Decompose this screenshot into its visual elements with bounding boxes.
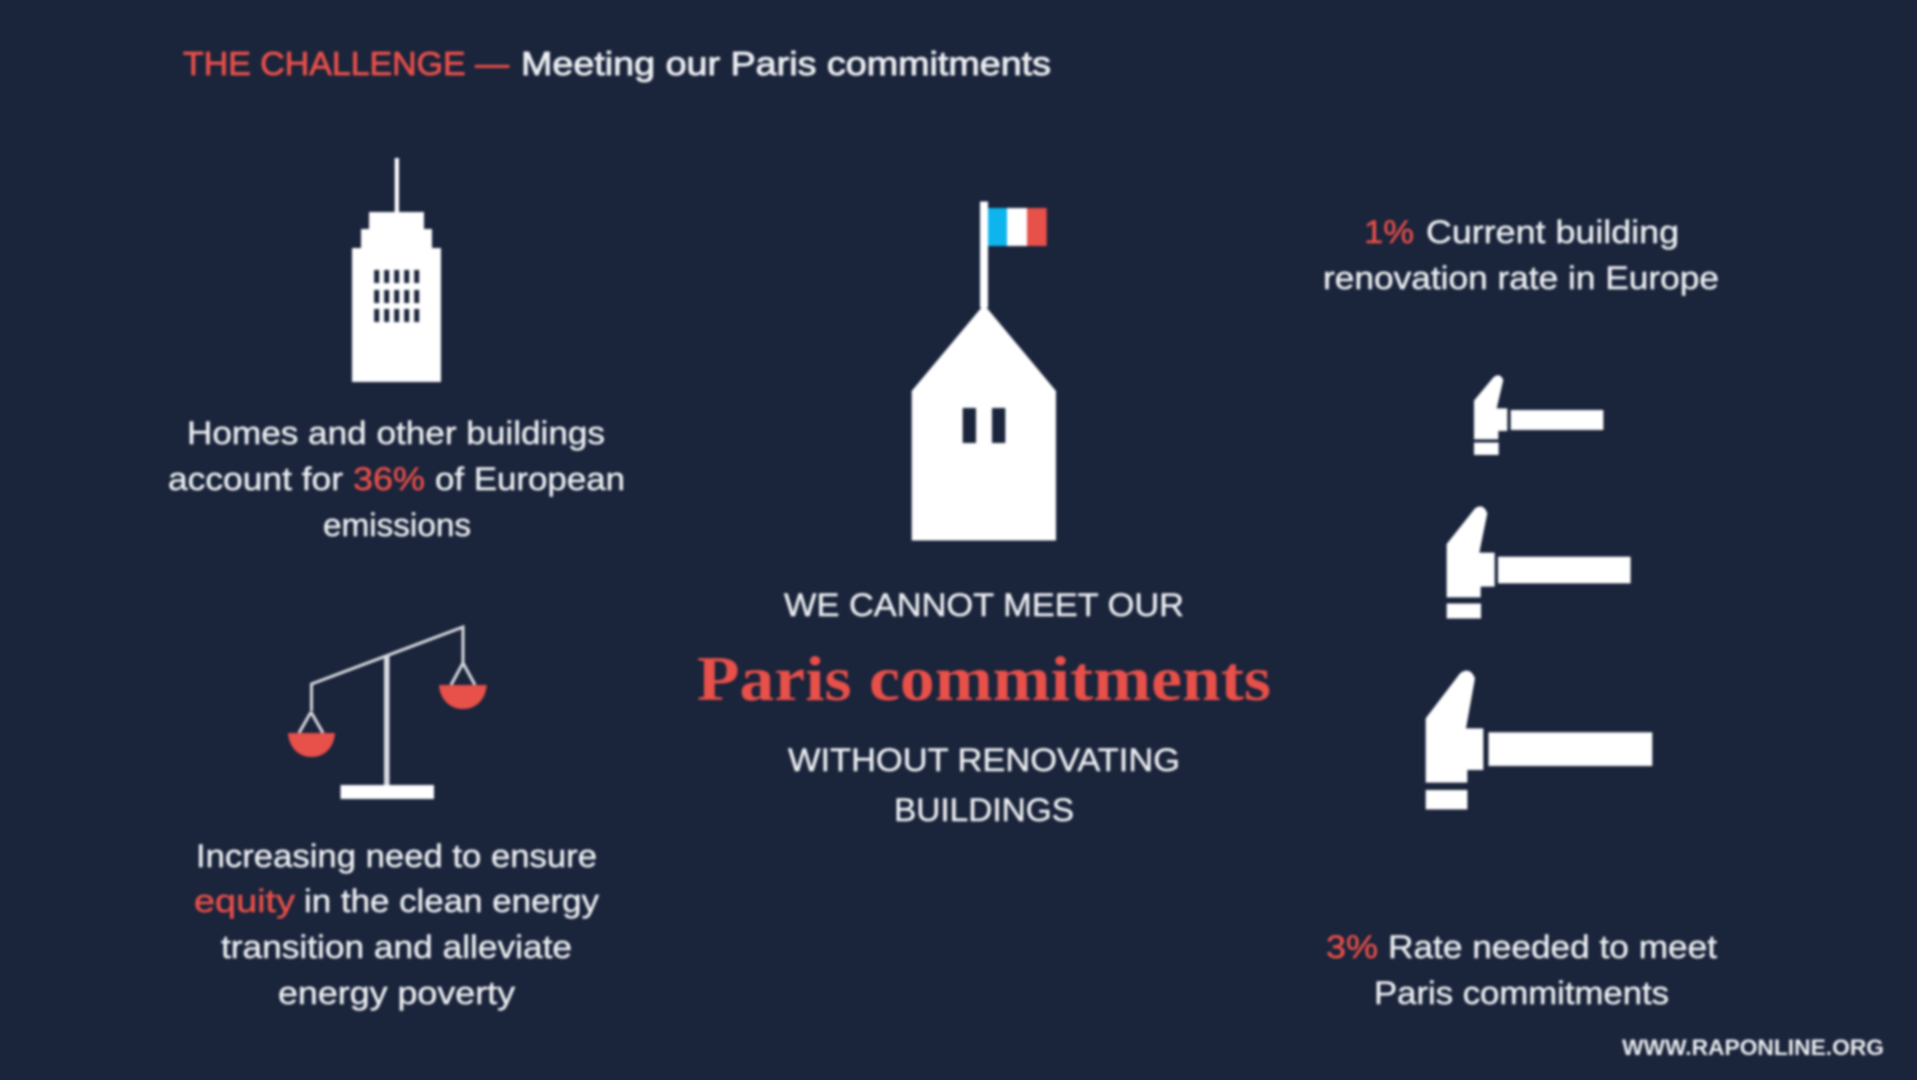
title [183, 45, 1051, 82]
icon: balance scale [288, 627, 487, 799]
text: buildings account for 36% of emissions: of European [435, 461, 625, 497]
icon: small hammer [1474, 375, 1603, 455]
text: 3% needed rate: 3% [1326, 929, 1378, 965]
text: buildings account for 36% of emissions: Homes and other buildings [187, 415, 605, 451]
text: buildings account for 36% of emissions: account for [168, 461, 343, 497]
icon: house with French flag [912, 202, 1056, 540]
title: Meeting our Paris commitments [521, 45, 1051, 82]
panel: building emissions [168, 158, 625, 543]
text: 3% needed rate: Rate needed to meet [1388, 929, 1717, 965]
text: 3% needed rate [1326, 929, 1717, 1011]
text: 3% needed rate: Paris commitments [1374, 975, 1669, 1011]
panel: central message [697, 202, 1271, 828]
text: equity in the clean energy transition [194, 838, 599, 1011]
text: equity in the clean energy transition: transition and alleviate [221, 929, 572, 965]
text: 1% current rate: 1% [1364, 214, 1414, 250]
icon: medium hammer [1447, 506, 1631, 618]
title: THE CHALLENGE — [183, 45, 509, 82]
text: equity in the clean energy transition: Increasing need to ensure [196, 838, 597, 874]
panel: equity [194, 627, 599, 1011]
text: without renovating buildings: BUILDINGS [894, 792, 1074, 828]
heading: Paris commitments: Paris commitments [697, 644, 1271, 714]
text: equity in the clean energy transition: equity [194, 883, 295, 919]
icon: large hammer [1426, 671, 1652, 809]
source url: WWW.RAPONLINE.ORG [1622, 1035, 1884, 1060]
text: buildings account for 36% of emissions: 36% [353, 461, 425, 497]
text: buildings account for 36% of emissions: emissions [323, 507, 471, 543]
text: equity in the clean energy transition: energy poverty [278, 975, 515, 1011]
text: 1% current rate: renovation rate in Europe [1323, 260, 1719, 296]
text: 1% current rate: Current building [1426, 214, 1679, 250]
panel: renovation rates [1323, 214, 1719, 1011]
text: 1% current rate [1323, 214, 1719, 296]
text: equity in the clean energy transition: in the clean energy [304, 883, 599, 919]
text: buildings account for 36% of emissions [168, 415, 625, 543]
text: without renovating buildings [788, 742, 1180, 828]
icon: tower building [352, 158, 441, 382]
text: without renovating buildings: WITHOUT RENOVATING [788, 742, 1180, 778]
text: we cannot meet our: WE CANNOT MEET OUR [784, 587, 1184, 623]
